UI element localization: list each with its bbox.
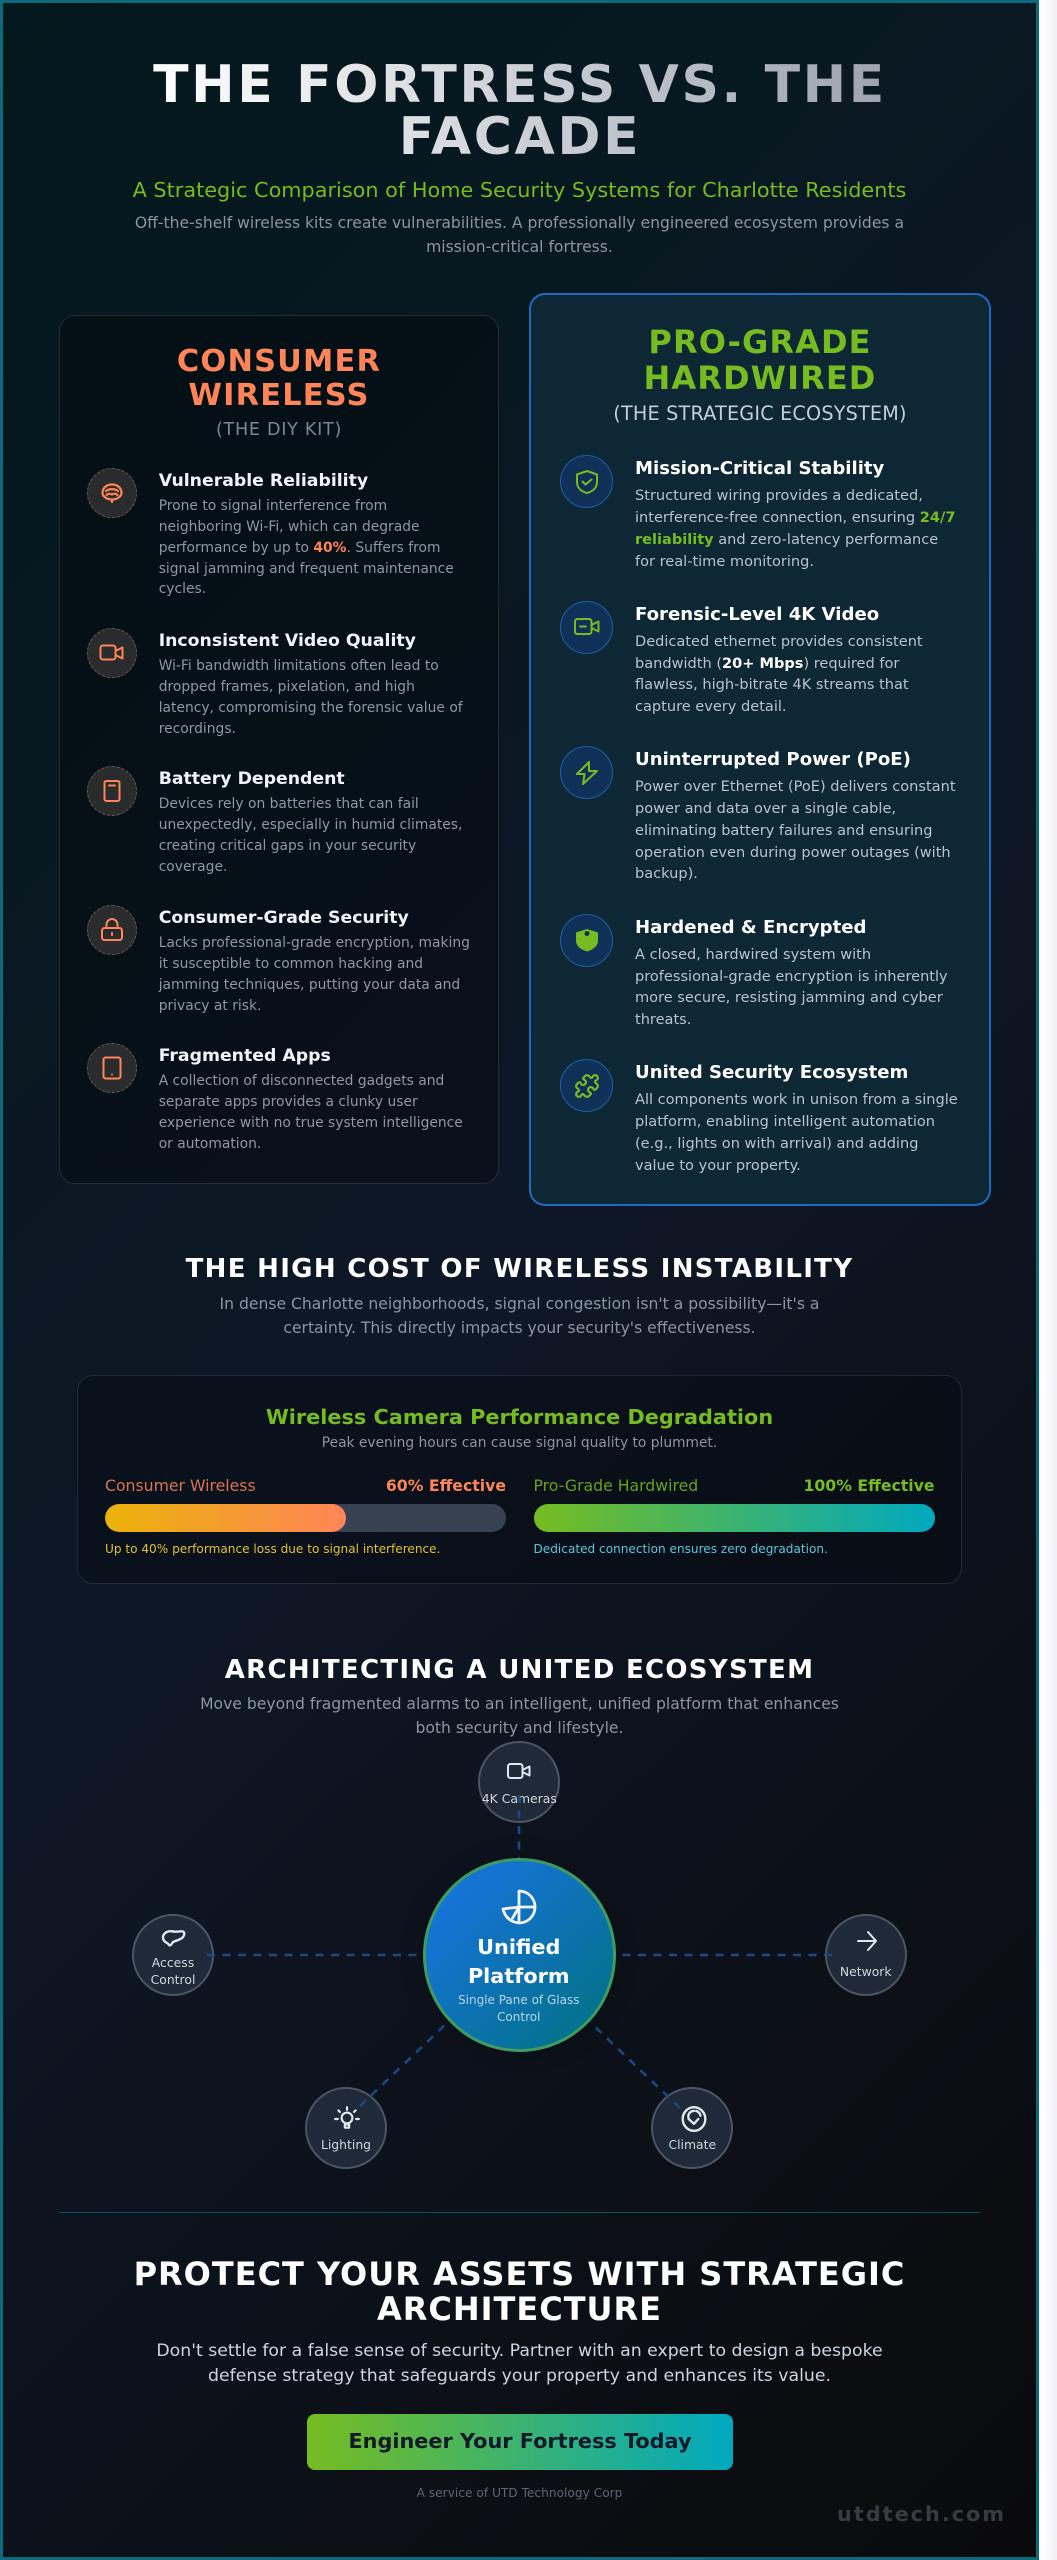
heading: pro-grade hardwired: PRO-GRADE [648,323,872,361]
label: Climate [668,2137,716,2152]
item: consumer-grade security [87,905,470,1014]
item text: performance by up to 40%. Suffers from [159,540,440,556]
item text: platform, enabling intelligent automation [635,1113,935,1130]
item text: separate apps provides a clunky user [159,1094,418,1110]
item text: coverage. [159,859,227,875]
section intro: high cost: In dense Charlotte neighborhoods, signal congestion isn't a possibility—it's a [220,1295,819,1313]
service note: A service of UTD Technology Corp [417,2486,622,2500]
section intro: ecosystem: both security and lifestyle. [415,1719,624,1737]
item text [159,796,462,875]
icon: arrow [857,1931,877,1951]
heading: pro-grade hardwired: HARDWIRED [644,359,876,397]
item text: All components work in unison from a single [635,1091,958,1108]
item text: signal jamming and frequent maintenance [159,561,454,577]
item text: interference-free connection, ensuring 24/7 [635,509,955,526]
heading: consumer wireless: WIRELESS [188,378,370,413]
item text: professional-grade encryption is inherently [635,968,948,985]
item: inconsistent video quality [87,628,463,737]
item title: Consumer-Grade Security [159,908,409,928]
item text: eliminating battery failures and ensuring [635,822,933,839]
item text: unexpectedly, especially in humid climates, [159,817,462,833]
icon: shield check [560,455,613,508]
item text: Power over Ethernet (PoE) delivers constant [635,778,956,795]
title: THE FORTRESS VS. THE [153,55,887,115]
item text [159,658,463,737]
section intro: ecosystem [200,1695,839,1737]
item text: recordings. [159,721,236,737]
item text [635,778,956,882]
item text: flawless, high-bitrate 4K streams that [635,676,909,693]
icon: puzzle piece [560,1059,613,1112]
bar track and fill [534,1504,934,1532]
icon: solid shield [560,914,613,966]
item text: Wi-Fi bandwidth limitations often lead to [159,658,439,674]
bar value: 60% Effective [386,1476,506,1495]
section intro: ecosystem: Move beyond fragmented alarms to an intelligent, unified platform that enhances [200,1695,839,1713]
item: fragmented apps [87,1043,463,1152]
item text: A closed, hardwired system with [635,946,871,963]
central hub: unified platform [422,1858,616,2052]
item text: Prone to signal interference from [159,498,387,514]
item title: Vulnerable Reliability [159,471,368,491]
cta heading [0,2256,1039,2326]
watermark: utdtech.com [837,2502,1006,2526]
item text [159,498,454,597]
icon: access control [162,1930,186,1947]
item text: value to your property. [635,1157,801,1174]
label: Control [151,1972,195,1987]
icon: lightning bolt [560,746,613,799]
icon: climate [682,2106,706,2132]
heading: pro-grade hardwired [644,323,876,397]
label: 4K Cameras [482,1791,557,1806]
item text: reliability and zero-latency performance [635,531,938,548]
item: hardened and encrypted [560,914,948,1028]
bar track and fill [105,1504,506,1532]
item text: for real-time monitoring. [635,553,814,570]
item text: capture every detail. [635,698,787,715]
item: battery dependent [87,766,462,875]
item: forensic-level 4k video [560,601,923,715]
label: Access [152,1955,194,1970]
section intro: high cost: certainty. This directly impacts your security's effectiveness. [283,1319,756,1337]
label: Network [840,1964,892,1979]
item text: bandwidth (20+ Mbps) required for [635,655,899,672]
heading: consumer wireless [177,344,381,413]
chart subtitle: Peak evening hours can cause signal quality to plummet. [322,1434,717,1450]
item: united security ecosystem [560,1059,958,1174]
cta heading: ARCHITECTURE [377,2290,662,2328]
item text [635,487,955,570]
item text: more secure, resisting jamming and cyber [635,989,943,1006]
icon: light bulb [334,2106,360,2129]
item title: Forensic-Level 4K Video [635,604,879,625]
item title: Mission-Critical Stability [635,458,884,479]
icon: video camera [87,628,137,678]
title [150,59,890,163]
intro text [135,214,904,256]
divider [59,2212,980,2213]
node: lighting [305,2087,387,2169]
item text: jamming techniques, putting your data and [159,977,460,993]
heading: consumer wireless: CONSUMER [177,344,381,379]
item: uninterrupted power [560,746,956,882]
bar label: Consumer Wireless [105,1476,256,1495]
bar note: Up to 40% performance loss due to signal interference. [105,1542,440,1556]
cta text [0,2339,1039,2388]
bar group: consumer wireless [105,1476,506,1556]
item text: power and data over a single cable, [635,800,896,817]
intro text: mission-critical fortress. [426,238,613,256]
subheading: the diy kit: (THE DIY KIT) [216,420,342,440]
item text: neighboring Wi-Fi, which can degrade [159,519,420,535]
cta button: Engineer Your Fortress Today [348,2429,692,2453]
cta heading: PROTECT YOUR ASSETS WITH STRATEGIC [134,2254,905,2292]
item title: Battery Dependent [159,769,345,789]
icon: segmented pie [502,1890,536,1924]
hub subtitle: Control [497,2010,540,2024]
panel: pro-grade hardwired [529,293,991,1206]
icon: battery [87,766,137,816]
hub title: Unified [477,1935,560,1959]
item title: United Security Ecosystem [635,1062,908,1083]
item text [635,1091,958,1174]
icon: wifi interference [87,468,137,518]
cta text: defense strategy that safeguards your property and enhances its value. [208,2366,831,2386]
hub title: Platform [468,1964,570,1988]
item text: privacy at risk. [159,998,261,1014]
hub title [468,1935,570,1988]
item text: Lacks professional-grade encryption, making [159,935,470,951]
item text: threats. [635,1011,691,1028]
item text: experience with no true system intelligence [159,1115,463,1131]
label [151,1955,195,1987]
node: network [825,1914,907,1996]
icon: video camera [560,600,613,654]
icon: padlock [87,905,137,955]
bar value: 100% Effective [803,1476,934,1495]
panel: consumer wireless [59,315,499,1184]
cta button [307,2414,733,2470]
item: vulnerable reliability [87,468,454,597]
bar label: Pro-Grade Hardwired [534,1476,698,1495]
item title: Hardened & Encrypted [635,917,866,938]
intro text: Off-the-shelf wireless kits create vulnerabilities. A professionally engineered ecosystem provides a [135,214,904,232]
item text: it susceptible to common hacking and [159,956,423,972]
subheading: the strategic ecosystem: (THE STRATEGIC ECOSYSTEM) [613,402,907,425]
item text: creating critical gaps in your security [159,838,416,854]
item: mission-critical stability [560,455,955,570]
item text: Dedicated ethernet provides consistent [635,633,923,650]
ecosystem diagram [132,1741,907,2169]
item text: (e.g., lights on with arrival) and adding [635,1135,918,1152]
chart title: Wireless Camera Performance Degradation [266,1404,773,1428]
label: Lighting [321,2137,371,2152]
item text: backup). [635,865,698,882]
icon: camera [507,1763,530,1779]
item text: Devices rely on batteries that can fail [159,796,419,812]
subtitle: A Strategic Comparison of Home Security Systems for Charlotte Residents [133,178,906,202]
section intro: high cost [220,1295,819,1337]
item text: Structured wiring provides a dedicated, [635,487,923,504]
icon: tablet [87,1043,137,1093]
hub subtitle [458,1993,579,2024]
item text: A collection of disconnected gadgets and [159,1073,444,1089]
item text [158,1073,463,1152]
item text [158,935,470,1014]
node: 4k cameras [478,1741,560,1823]
item text: operation even during power outages (with [635,844,951,861]
call to action [134,2254,905,2500]
node: climate [651,2087,733,2169]
section heading: ecosystem: ARCHITECTING A UNITED ECOSYSTEM [225,1655,814,1685]
item title: Uninterrupted Power (PoE) [635,749,911,770]
bar group: pro-grade hardwired [534,1476,935,1556]
item text: dropped frames, pixelation, and high [159,679,415,695]
item text [635,946,948,1028]
panel: performance chart [77,1375,962,1584]
hub subtitle: Single Pane of Glass [458,1993,579,2007]
node: access control [132,1914,214,1996]
header [132,55,906,256]
bar note: Dedicated connection ensures zero degradation. [534,1542,828,1556]
item text: or automation. [159,1136,261,1152]
item title: Inconsistent Video Quality [159,631,416,651]
title: FACADE [399,107,641,167]
section heading: high cost: THE HIGH COST OF WIRELESS INSTABILITY [186,1254,853,1284]
item title: Fragmented Apps [159,1046,331,1066]
item text: latency, compromising the forensic value of [159,700,463,716]
cta text: Don't settle for a false sense of security. Partner with an expert to design a bespoke [156,2341,883,2361]
connection lines [207,1795,832,2109]
item text [635,633,923,715]
item text: cycles. [159,581,206,597]
